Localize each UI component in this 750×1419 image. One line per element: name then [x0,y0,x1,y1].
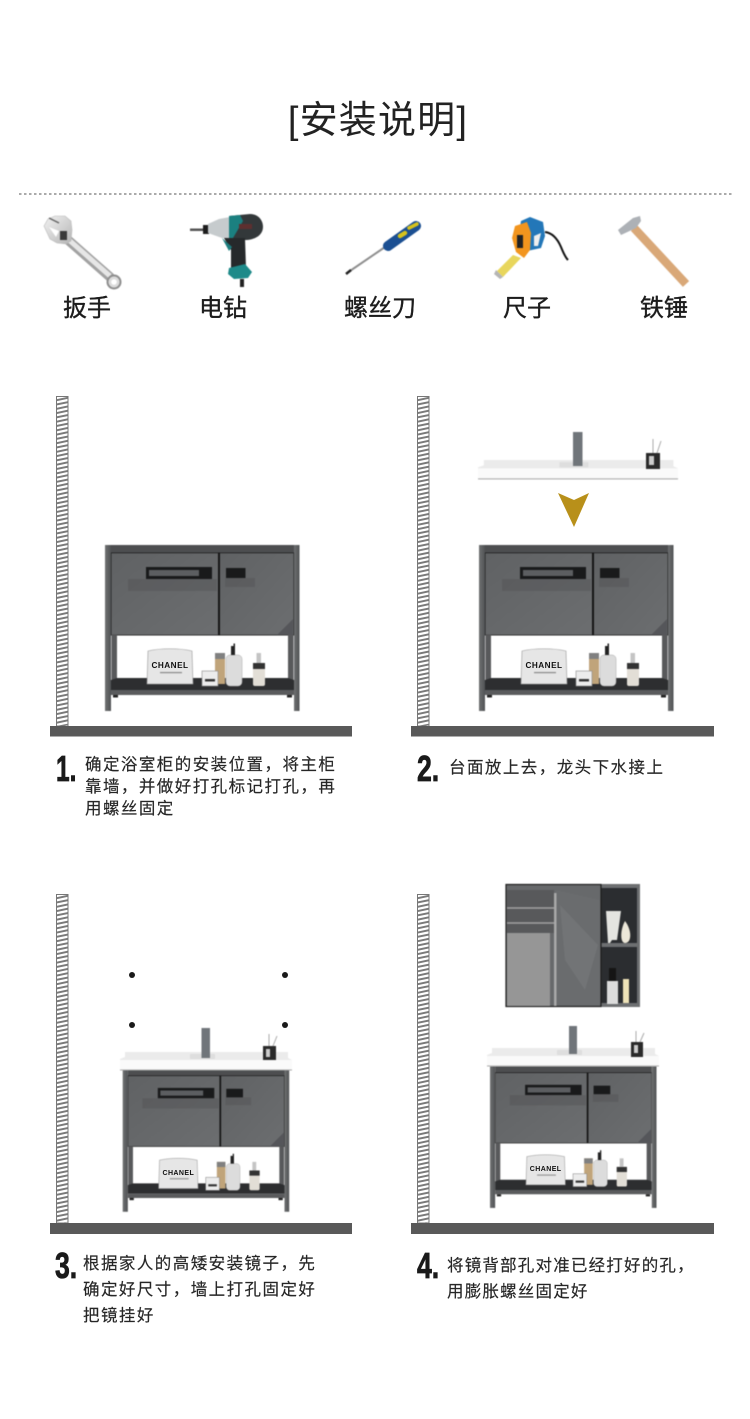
step number: 1. [56,748,76,789]
vanity cabinet [105,545,300,711]
vanity cabinet: CHANEL [525,661,563,670]
step number: 2. [417,748,439,789]
basin with faucet [487,1026,659,1066]
tool: hammer [618,216,686,284]
label: tape measure: 尺子 [503,295,551,322]
step text: 确定好尺寸，墙上打孔固定好 [83,1280,316,1299]
step text: 确定浴室柜的安装位置，将主柜 [85,755,336,774]
title: [安装说明] [288,100,468,142]
vanity cabinet: CHANEL [151,661,189,670]
step text: 靠墙，并做好打孔标记打孔，再 [85,777,336,796]
step text: 用螺丝固定 [85,799,175,818]
panel: step 3 [50,894,352,1325]
vanity cabinet [479,545,674,711]
step text: 根据家人的高矮安装镜子，先 [83,1254,316,1273]
step number: 4. [417,1245,439,1286]
tool: drill [190,214,263,287]
panel: step 2 [411,396,714,789]
label: wrench: 扳手 [63,295,111,322]
basin with faucet [120,1028,292,1070]
drill hole markers [129,972,288,1028]
label: screwdriver: 螺丝刀 [344,295,416,322]
step text: 把镜挂好 [83,1306,155,1325]
wall [56,396,68,726]
vanity cabinet: CHANEL [530,1166,562,1173]
tools row [44,214,688,322]
label: drill: 电钻 [199,295,247,322]
tool: tape measure [494,217,568,279]
vanity cabinet: CHANEL [162,1170,194,1177]
label: hammer: 铁锤 [640,295,688,322]
arrow: down [558,493,589,527]
vanity cabinet [123,1069,289,1212]
wall [418,894,429,1223]
floor [50,1223,352,1234]
panel: step 4 [411,884,714,1301]
step text: 用膨胀螺丝固定好 [447,1282,589,1301]
tool: wrench [44,216,120,288]
floor [411,1223,714,1234]
step number: 3. [55,1245,77,1286]
panel: step 1 [50,396,352,818]
mirror cabinet [506,884,640,1007]
wall [418,396,429,726]
wall [56,894,68,1223]
basin with faucet [478,432,678,479]
step text: 将镜背部孔对准已经打好的孔， [447,1256,695,1275]
step text: 台面放上去，龙头下水接上 [449,758,664,777]
floor [411,726,714,736]
floor [50,726,352,736]
tool: screwdriver [346,224,417,274]
vanity cabinet [490,1066,656,1208]
